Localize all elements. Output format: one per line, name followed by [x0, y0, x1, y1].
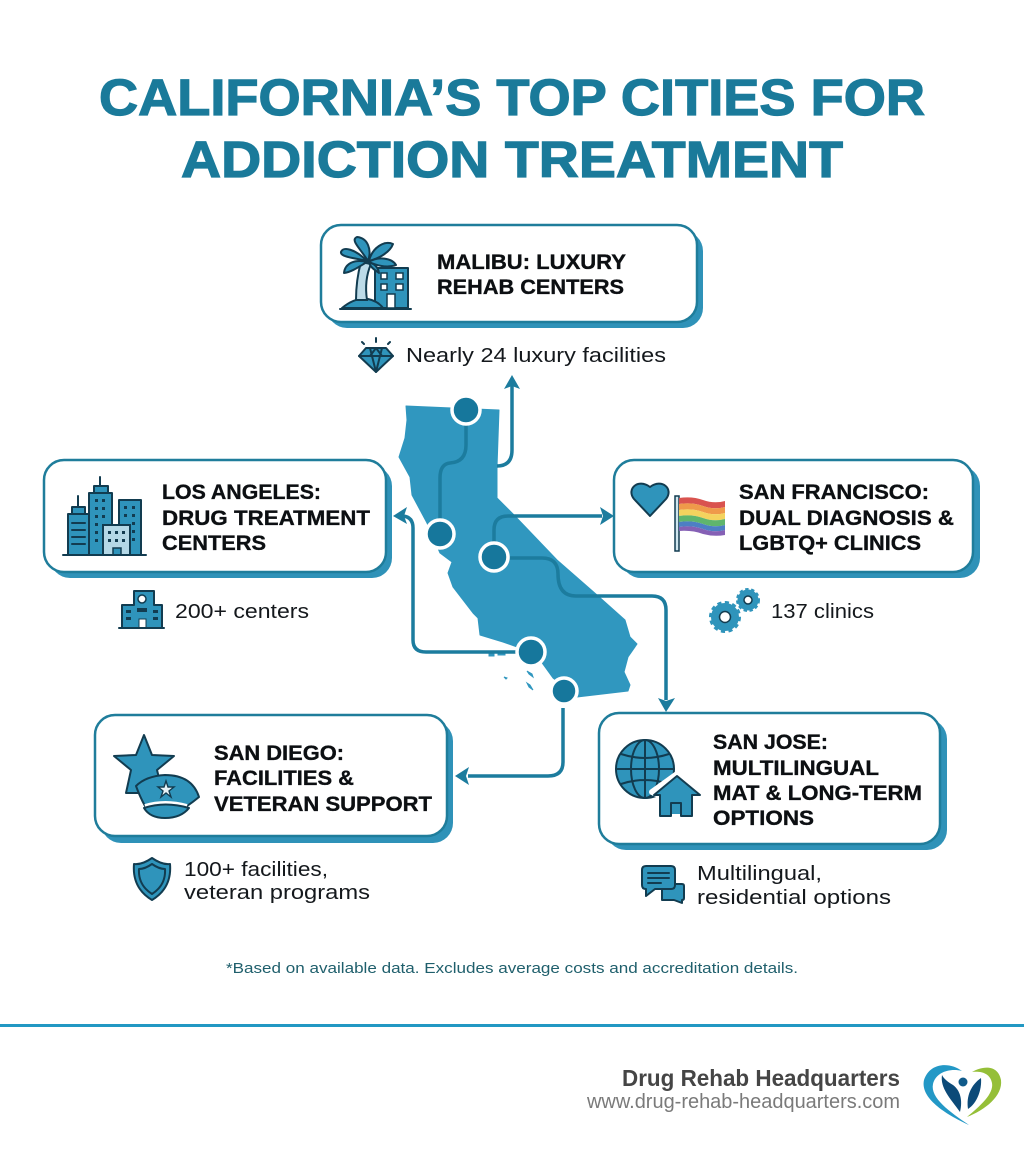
connector to San Diego [455, 708, 563, 785]
heading: VETERAN SUPPORT [214, 793, 432, 816]
title: CALIFORNIA’S TOP CITIES FOR [99, 69, 925, 126]
heading: MAT & LONG-TERM [713, 782, 922, 805]
card [599, 713, 940, 844]
brand url: www.drug-rehab-headquarters.com [586, 1091, 900, 1113]
heading [162, 481, 370, 555]
heading [713, 731, 922, 830]
card [321, 225, 697, 322]
brand name: Drug Rehab Headquarters [622, 1065, 900, 1091]
heading: DUAL DIAGNOSIS & [739, 507, 954, 530]
card shadow [327, 231, 703, 328]
heading: SAN FRANCISCO: [739, 481, 929, 504]
title [99, 69, 925, 188]
icon: skyline [63, 477, 146, 555]
stat: Nearly 24 luxury facilities [406, 345, 666, 367]
heading [214, 742, 432, 816]
logo: heart with figure and leaves [924, 1065, 1001, 1125]
heading: MALIBU: LUXURY [437, 251, 626, 274]
pin: Los Angeles [517, 638, 545, 666]
icon: speech bubbles [642, 866, 684, 903]
islands [489, 654, 533, 690]
heading: REHAB CENTERS [437, 276, 624, 299]
card [614, 460, 973, 572]
icon: rainbow flag [675, 496, 725, 551]
card shadow [50, 466, 392, 578]
pin: north [452, 396, 480, 424]
connector to San Francisco [494, 507, 614, 545]
icon: diamond [359, 338, 393, 372]
panel: Malibu [321, 225, 703, 372]
connector to Malibu [497, 375, 520, 466]
stat: Multilingual, [697, 863, 822, 885]
stat: residential options [697, 887, 891, 909]
heading: SAN DIEGO: [214, 742, 344, 765]
panel: San Diego [95, 715, 453, 904]
stat: 200+ centers [175, 601, 309, 623]
stat [184, 859, 370, 904]
heading [739, 481, 954, 555]
icon: palm tree and building [340, 237, 411, 309]
card shadow [606, 719, 947, 850]
map: California with connectors [393, 375, 675, 785]
heading: SAN JOSE: [713, 731, 828, 754]
title: ADDICTION TREATMENT [181, 131, 843, 188]
heading: LOS ANGELES: [162, 481, 321, 504]
stat: 100+ facilities, [184, 859, 328, 881]
icon: globe and house [616, 740, 702, 817]
heading: MULTILINGUAL [713, 757, 879, 780]
icon: heart [631, 484, 669, 516]
icon: shield [134, 858, 170, 900]
pin: Malibu coast [426, 520, 454, 548]
footnote: *Based on available data. Excludes average costs and accreditation details. [226, 961, 798, 977]
heading: FACILITIES & [214, 767, 354, 790]
panel: San Francisco [614, 460, 980, 631]
icon: star and veteran cap [114, 735, 199, 818]
card shadow [621, 466, 980, 578]
card [44, 460, 386, 572]
connector to Los Angeles [393, 507, 518, 652]
connector to San Jose [510, 558, 675, 712]
connector north pin to central coast pin [440, 425, 466, 522]
card [95, 715, 447, 836]
stat [697, 863, 891, 909]
state outline [399, 406, 637, 697]
pin: San Diego [551, 678, 577, 704]
panel: San Jose [599, 713, 947, 909]
heading: LGBTQ+ CLINICS [739, 532, 921, 555]
pin: Bay area [480, 543, 508, 571]
card shadow [101, 721, 453, 843]
stat: 137 clinics [771, 601, 874, 623]
stat: veteran programs [184, 882, 370, 904]
icon: hospital [119, 591, 164, 628]
heading [437, 251, 626, 299]
heading: CENTERS [162, 532, 266, 555]
icon: gears [711, 590, 758, 631]
heading: DRUG TREATMENT [162, 507, 370, 530]
heading: OPTIONS [713, 807, 814, 830]
footer rule [0, 1024, 1024, 1027]
panel: Los Angeles [44, 460, 392, 628]
